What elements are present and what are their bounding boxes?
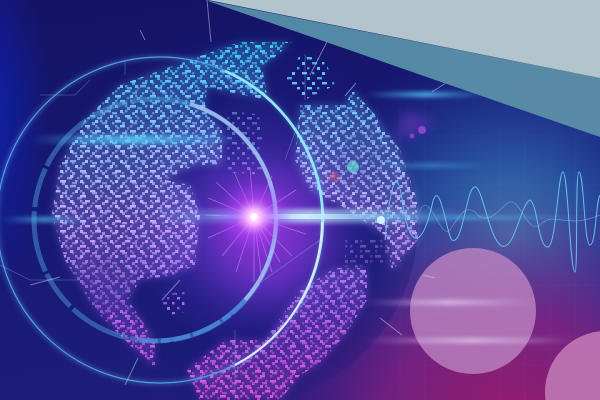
outer ring — [0, 57, 323, 383]
small pink bubble — [545, 331, 600, 400]
large pink bubble — [410, 248, 536, 374]
top teal wedge — [205, 0, 600, 137]
continent glow — [52, 42, 418, 400]
purple nebula around core — [213, 176, 323, 296]
background grid — [400, 100, 600, 400]
star burst — [216, 179, 292, 255]
inner segmented ring — [34, 99, 276, 341]
sound wave lines — [385, 172, 600, 272]
star rays — [205, 168, 306, 282]
top light grey wedge — [208, 0, 600, 78]
bubble flares — [365, 300, 575, 343]
circuit lines — [0, 55, 320, 400]
globe sphere — [52, 40, 418, 400]
horizontal flares — [0, 92, 600, 223]
small streaks — [30, 0, 452, 385]
lens flare dots — [328, 112, 437, 224]
globe dotted continents — [52, 42, 418, 400]
